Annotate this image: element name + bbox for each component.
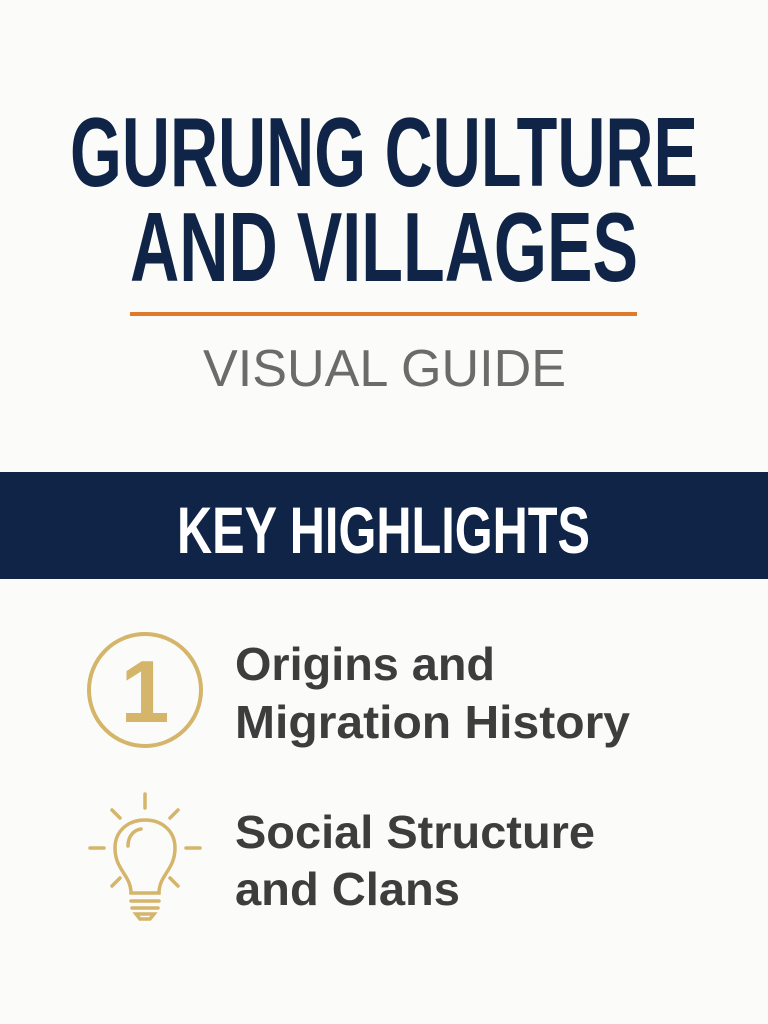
item 2 text: Social Structure [235, 806, 595, 858]
item 2 text [235, 806, 595, 915]
icon: light bulb [90, 794, 200, 919]
item 2 text: and Clans [235, 863, 460, 915]
banner: key highlights [0, 472, 768, 579]
banner: key highlights: KEY HIGHLIGHTS [177, 493, 590, 567]
icon: number one: 1 [121, 642, 169, 741]
item 1 text [235, 638, 630, 748]
subtitle: VISUAL GUIDE [203, 340, 566, 398]
item 1 text: Migration History [235, 696, 630, 748]
divider accent [130, 312, 637, 316]
title [70, 97, 698, 302]
icon: number one [89, 634, 201, 746]
item 1 text: Origins and [235, 638, 495, 690]
